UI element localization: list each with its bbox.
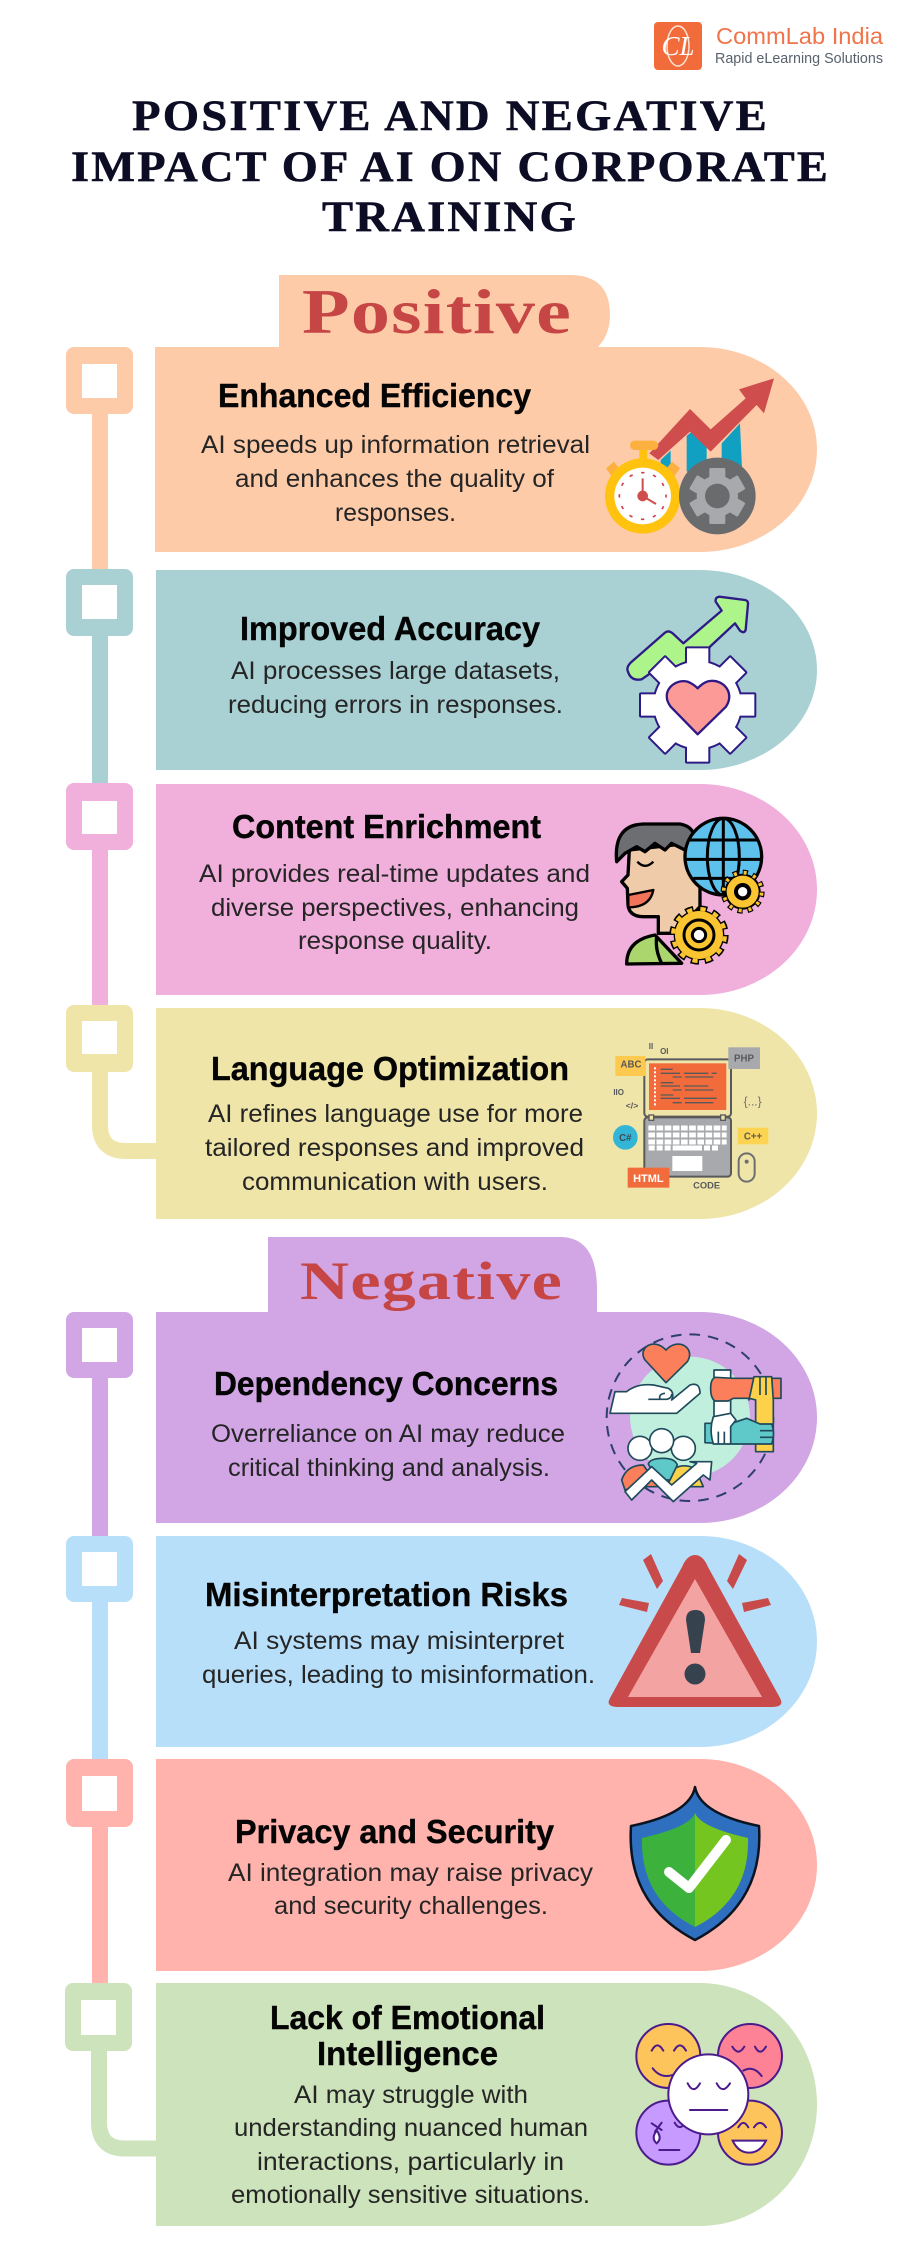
- timeline node 5: [66, 1312, 133, 1378]
- timeline node 8: [65, 1983, 132, 2051]
- icon: laptop with code labels: ABC: [621, 1060, 641, 1071]
- panel: Enhanced Efficiency: responses.: [335, 499, 456, 527]
- panel: Improved Accuracy: [156, 570, 817, 770]
- panel: Language Optimization: communication with users.: [242, 1168, 548, 1196]
- timeline stems: negative section: [99, 1370, 156, 2148]
- panel: Enhanced Efficiency: [155, 347, 817, 552]
- panel: Misinterpretation Risks: queries, leading to misinformation.: [202, 1661, 595, 1689]
- icon: emotion faces: [636, 2024, 782, 2165]
- panel: Content Enrichment: response quality.: [298, 927, 492, 955]
- timeline stems: positive section: [100, 400, 156, 1151]
- icon: shield with check mark: [631, 1787, 759, 1940]
- section tab: Positive: [279, 275, 610, 348]
- icon: laptop with code labels: IIO: [613, 1088, 624, 1097]
- panel: Improved Accuracy: Improved Accuracy: [240, 610, 541, 647]
- icon: laptop with code labels: CODE: [693, 1181, 720, 1191]
- icon: laptop with code labels: C#: [619, 1133, 632, 1144]
- panel: Lack of Emotional Intelligence: [156, 1983, 817, 2226]
- icon: person with globe and gears: [616, 818, 762, 964]
- panel: Misinterpretation Risks: AI systems may misinterpret: [234, 1627, 564, 1655]
- panel: Content Enrichment: [156, 784, 817, 995]
- panel: Content Enrichment: diverse perspectives, enhancing: [211, 894, 579, 922]
- panel: Improved Accuracy: reducing errors in responses.: [228, 691, 563, 719]
- logo: CommLab India: CommLab India: [716, 23, 883, 49]
- panel: Misinterpretation Risks: [156, 1536, 817, 1747]
- panel: Language Optimization: Language Optimization: [211, 1050, 569, 1087]
- timeline node 2: [66, 569, 133, 636]
- icon: laptop with code labels: HTML: [633, 1173, 664, 1185]
- panel: Enhanced Efficiency: AI speeds up information retrieval: [201, 431, 590, 459]
- timeline node 3: [66, 783, 133, 850]
- section tab: Negative: Negative: [300, 1251, 563, 1311]
- timeline node 1: [66, 347, 133, 414]
- panel: Dependency Concerns: critical thinking and analysis.: [228, 1454, 550, 1482]
- panel: Lack of Emotional Intelligence: Intelligence: [317, 2035, 498, 2072]
- title: [71, 93, 830, 241]
- logo: CommLab India: [654, 22, 883, 70]
- icon: laptop with code labels: {...}: [744, 1094, 762, 1108]
- panel: Enhanced Efficiency: Enhanced Efficiency: [218, 377, 532, 414]
- timeline node 4: [66, 1005, 133, 1072]
- timeline node 7: [66, 1759, 133, 1827]
- panel: Lack of Emotional Intelligence: Lack of Emotional: [270, 1999, 545, 2036]
- panel: Language Optimization: AI refines language use for more: [208, 1100, 583, 1128]
- section tab: Positive: Positive: [302, 276, 572, 347]
- panel: Dependency Concerns: Overreliance on AI may reduce: [211, 1420, 565, 1448]
- icon: laptop with code labels: II: [649, 1042, 653, 1051]
- logo: CommLab India: Rapid eLearning Solutions: [715, 51, 883, 67]
- icon: caring hands and teamwork: [607, 1334, 781, 1502]
- panel: Content Enrichment: Content Enrichment: [232, 808, 541, 845]
- icon: gear with heart and green arrow: [627, 597, 754, 762]
- icon: laptop with code labels: PHP: [734, 1054, 754, 1065]
- panel: Privacy and Security: and security challenges.: [274, 1892, 548, 1920]
- icon: laptop with code labels: </>: [626, 1101, 638, 1111]
- panel: Lack of Emotional Intelligence: understanding nuanced human: [234, 2114, 588, 2142]
- title: IMPACT OF AI ON CORPORATE: [71, 144, 830, 191]
- panel: Privacy and Security: Privacy and Security: [235, 1813, 555, 1850]
- panel: Privacy and Security: AI integration may raise privacy: [228, 1859, 594, 1887]
- panel: Lack of Emotional Intelligence: interactions, particularly in: [257, 2148, 564, 2176]
- panel: Lack of Emotional Intelligence: emotionally sensitive situations.: [231, 2181, 590, 2209]
- panel: Enhanced Efficiency: and enhances the quality of: [235, 465, 554, 493]
- section tab: Negative: [268, 1237, 597, 1313]
- panel: Language Optimization: tailored responses and improved: [205, 1134, 584, 1162]
- timeline node 6: [66, 1536, 133, 1602]
- title: TRAINING: [322, 194, 578, 241]
- icon: warning triangle: [609, 1554, 781, 1707]
- panel: Privacy and Security: [156, 1759, 817, 1971]
- icon: laptop with code labels: OI: [660, 1047, 669, 1056]
- panel: Misinterpretation Risks: Misinterpretation Risks: [205, 1576, 568, 1613]
- icon: stopwatch, gear and rising arrow: [605, 378, 774, 534]
- icon: laptop with code labels: [613, 1042, 768, 1191]
- panel: Improved Accuracy: AI processes large datasets,: [231, 657, 560, 685]
- title: POSITIVE AND NEGATIVE: [132, 93, 769, 140]
- logo: CommLab India: CL: [661, 31, 695, 61]
- panel: Dependency Concerns: [156, 1312, 817, 1523]
- icon: laptop with code labels: C++: [744, 1132, 762, 1143]
- panel: Language Optimization: [156, 1008, 817, 1219]
- panel: Lack of Emotional Intelligence: AI may struggle with: [294, 2081, 528, 2109]
- panel: Dependency Concerns: Dependency Concerns: [214, 1365, 558, 1402]
- panel: Content Enrichment: AI provides real-time updates and: [199, 860, 590, 888]
